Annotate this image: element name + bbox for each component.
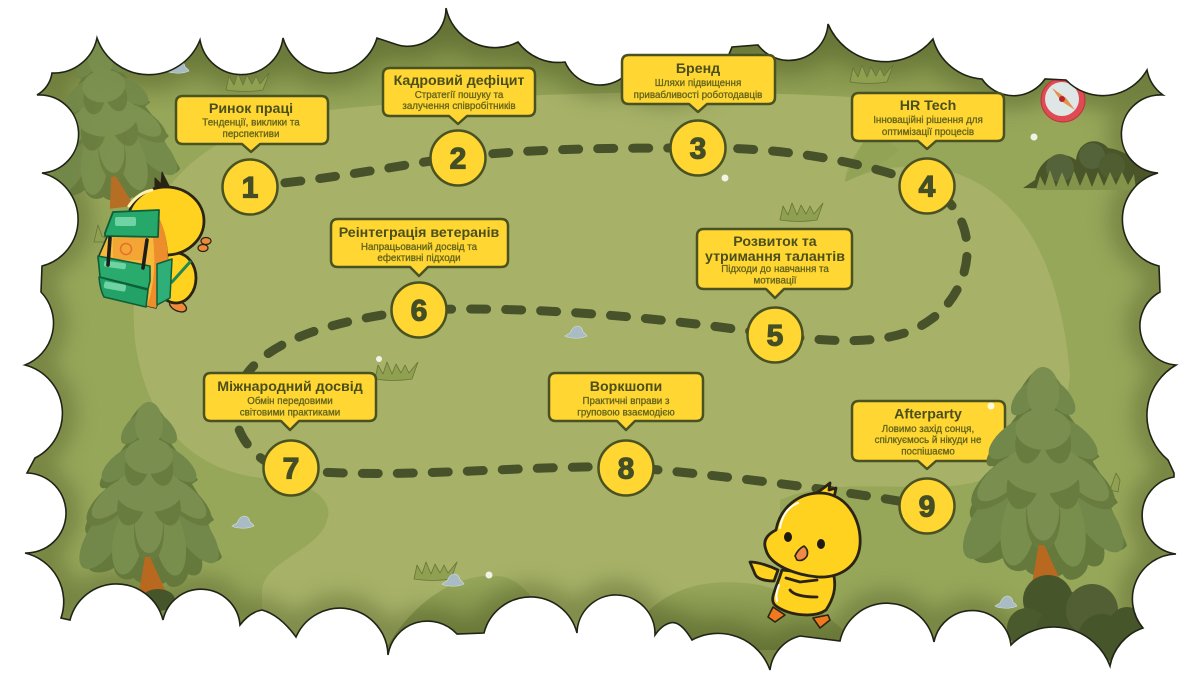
number 2: 2 <box>450 142 466 176</box>
number 2 <box>430 130 486 186</box>
callout 3: привабливості роботодавців <box>634 90 762 101</box>
tree: lower right <box>963 367 1127 580</box>
callout 9: Afterparty: Ловимо захід сонця, <box>882 424 974 435</box>
callout 1 <box>176 96 328 152</box>
number 6 <box>392 282 446 338</box>
number 5 <box>748 308 802 362</box>
decoration: small white flowers <box>376 134 1038 578</box>
stop 4: HR Tech <box>852 93 1004 214</box>
callout 5 <box>697 229 852 298</box>
callout 9: Afterparty: спілкуємось й нікуди не <box>875 435 982 446</box>
number 6: 6 <box>411 294 427 328</box>
callout 1: перспективи <box>223 129 279 140</box>
flower on callout 9 <box>988 402 994 410</box>
decoration: rocks <box>167 61 1017 608</box>
callout 7 <box>204 373 376 430</box>
callout 2: Кадровий дефіцит <box>394 73 524 89</box>
callout 4 <box>852 93 1004 149</box>
number 4 <box>900 158 954 214</box>
callout 3 <box>622 55 775 112</box>
callout 6 <box>331 219 508 276</box>
callout 2: залучення співробітників <box>402 101 516 112</box>
callout 9: Afterparty <box>852 401 1005 469</box>
callout 6: Реінтеграція ветеранів <box>339 225 500 241</box>
duck body and head <box>128 172 211 314</box>
callout 8: Практичні вправи з <box>582 396 670 407</box>
callout 8: груповою взаємодією <box>577 408 675 418</box>
pointing duck <box>750 483 860 628</box>
callout 3: Шляхи підвищення <box>655 78 741 89</box>
number 7 <box>264 440 318 496</box>
number 5: 5 <box>767 320 783 352</box>
callout 7: Обмін передовими <box>247 396 333 407</box>
icon: compass <box>1041 78 1085 122</box>
small bush under lower left tree <box>146 589 175 611</box>
duck with backpack <box>98 172 211 314</box>
number 8: 8 <box>618 452 634 486</box>
stop 7: Міжнародний досвід <box>204 373 376 496</box>
callout 5: Розвиток та <box>733 234 817 250</box>
callout 6: Напрацьований досвід та <box>361 242 478 253</box>
callout 8 <box>549 373 703 430</box>
number 1 <box>222 160 278 214</box>
callout 4: оптимізації процесів <box>882 127 974 138</box>
backpack <box>98 210 172 308</box>
stop 3: Бренд <box>622 55 775 176</box>
callout 3: Бренд <box>676 61 720 77</box>
dashed route through all stops <box>235 148 967 506</box>
callout 5: мотивації <box>754 276 797 286</box>
stop 5: Розвиток та утримання талантів <box>697 229 852 362</box>
callout 1: Ринок праці <box>209 101 293 117</box>
decoration: grass tufts <box>94 65 1120 580</box>
callout 8: Воркшопи <box>590 379 662 395</box>
stop 8: Воркшопи <box>549 373 703 496</box>
number 4: 4 <box>919 170 936 204</box>
callout 1: Тенденції, виклики та <box>202 118 300 128</box>
number 7: 7 <box>283 452 299 486</box>
callout 7: світовими практиками <box>240 408 340 418</box>
number 9: 9 <box>919 490 935 524</box>
number 3 <box>670 120 726 176</box>
stop 1: Ринок праці <box>176 96 328 214</box>
stop 2: Кадровий дефіцит <box>383 68 535 186</box>
callout 5: Підходи до навчання та <box>721 264 829 275</box>
feet <box>768 607 830 628</box>
callout 4: HR Tech <box>900 98 956 114</box>
stop 6: Реінтеграція ветеранів <box>331 219 508 338</box>
number 9 <box>900 478 954 534</box>
callout 9: Afterparty: Afterparty <box>894 406 962 422</box>
bush: upper right <box>1023 141 1160 190</box>
number 1: 1 <box>242 172 258 204</box>
tree: upper left <box>53 41 180 209</box>
callout 6: ефективні підходи <box>377 253 461 264</box>
callout 5: утримання талантів <box>705 249 845 265</box>
body and arms <box>750 562 835 615</box>
callout 7: Міжнародний досвід <box>217 379 363 395</box>
callout 9: Afterparty: поспішаємо <box>901 446 955 458</box>
number 8 <box>598 440 654 496</box>
callout 4: Інноваційні рішення для <box>873 115 983 126</box>
head <box>765 483 860 577</box>
callout 2: Стратегії пошуку та <box>415 90 504 101</box>
tree: lower left <box>70 402 228 592</box>
bush: lower right <box>1007 575 1145 662</box>
number 3: 3 <box>690 132 706 166</box>
callout 2 <box>383 68 535 124</box>
